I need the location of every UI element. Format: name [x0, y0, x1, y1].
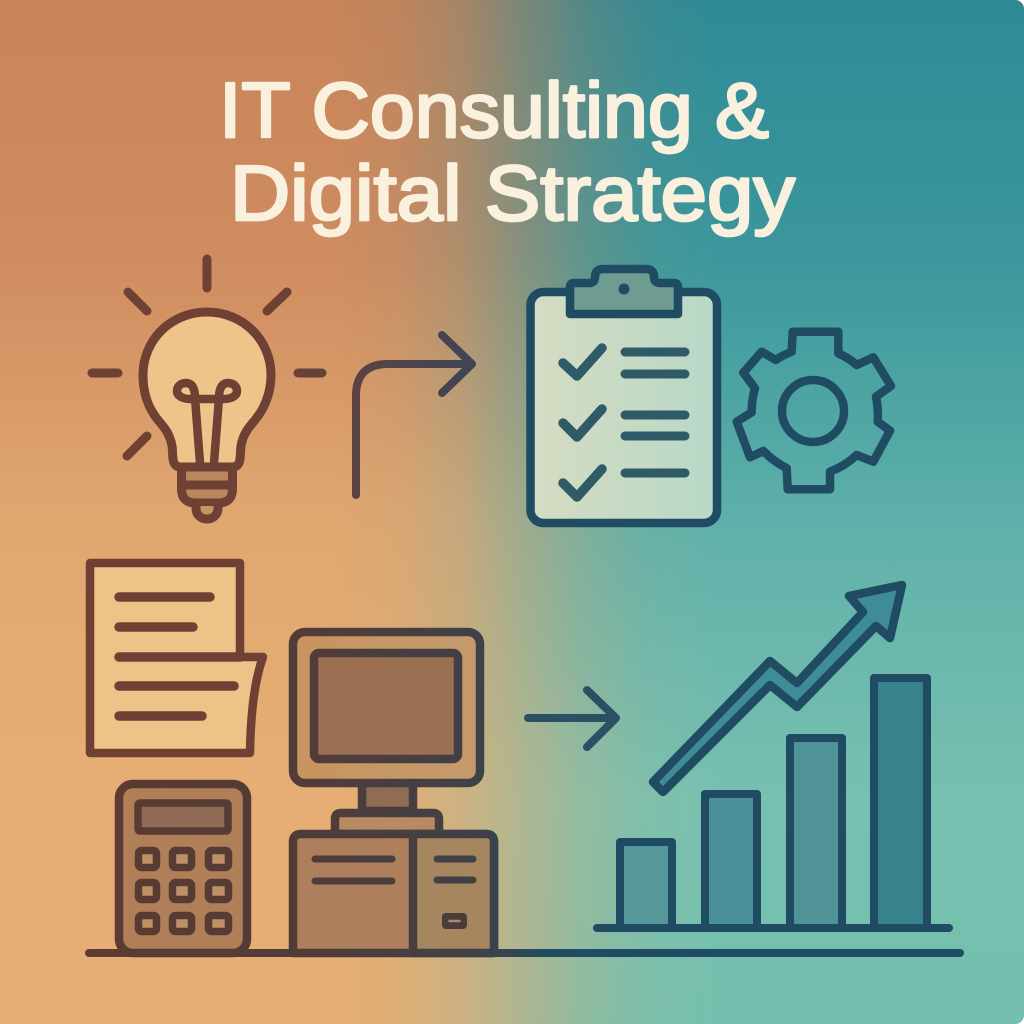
computer case [293, 834, 494, 953]
monitor stand [362, 783, 413, 811]
icon: clipboard checklist [530, 269, 717, 523]
bar chart [597, 678, 949, 928]
icon: light bulb [92, 259, 322, 519]
title: Digital Strategy [230, 149, 795, 237]
icon: calculator [119, 784, 247, 953]
bar 3 [790, 738, 842, 928]
chart axis [597, 924, 949, 932]
case button [442, 913, 467, 929]
icon: document [90, 563, 263, 753]
bar 2 [705, 794, 757, 928]
arrow: bent arrow to plan [356, 335, 472, 495]
title: IT Consulting & [219, 66, 769, 154]
icon: desktop computer [293, 632, 494, 953]
icon: gear [737, 332, 891, 489]
monitor body [293, 632, 480, 783]
drive lines [315, 859, 473, 881]
growth arrow [653, 585, 902, 792]
bar 1 [620, 842, 672, 928]
case right panel [413, 834, 494, 953]
bar 4 [874, 678, 927, 928]
arrow: computer to chart [528, 690, 616, 747]
monitor base [335, 813, 439, 834]
ground line [89, 949, 960, 957]
title [219, 66, 795, 237]
monitor screen [314, 653, 458, 759]
